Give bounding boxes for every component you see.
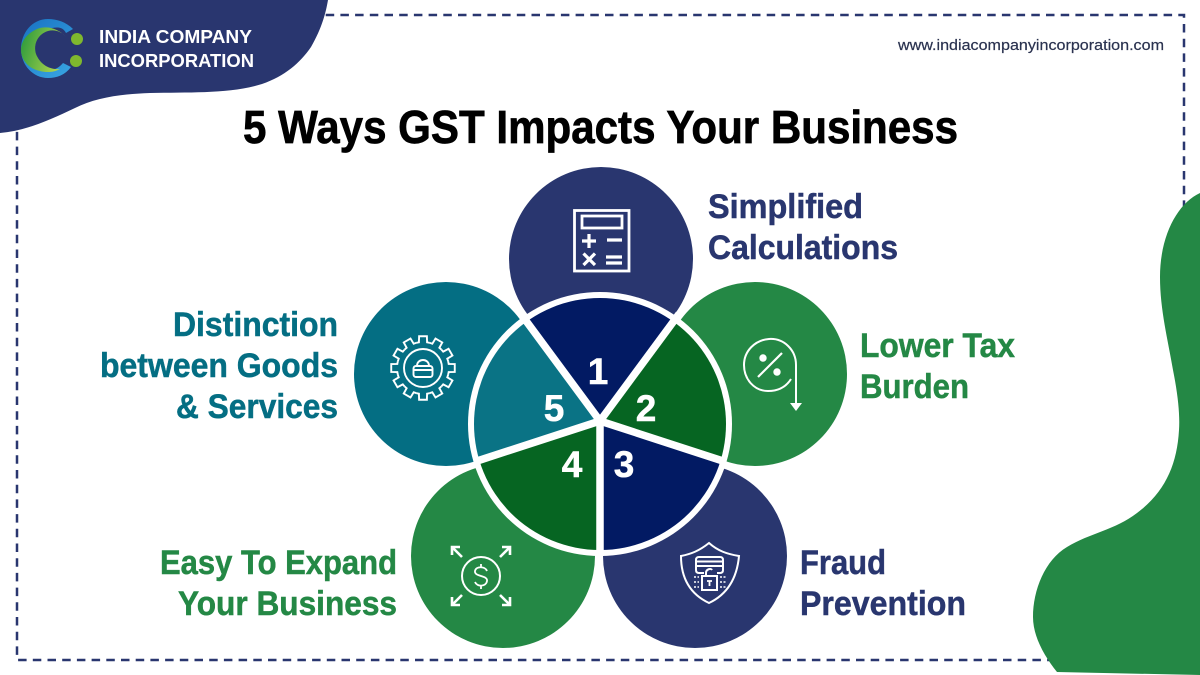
title: 5 Ways GST Impacts Your Business [243,101,958,153]
petal 2 [663,282,847,466]
label: easy to expand your business [160,544,397,623]
central pie [468,292,732,556]
label: simplified calculations: Simplified [708,188,863,226]
label: distinction between goods and services: Distinction [173,306,338,344]
petal 4 [411,464,595,648]
label: simplified calculations: Calculations [708,229,898,267]
segment numbers: 3 [614,444,634,485]
petal 3 [603,464,787,648]
icon: calculator [574,210,629,271]
label: fraud prevention: Prevention [800,585,966,623]
logo [21,19,83,78]
petal 1 [509,167,693,351]
segment numbers [544,351,656,485]
icon: dollar with arrows [452,547,510,605]
label: fraud prevention: Fraud [800,544,886,582]
label: easy to expand your business: Easy To Expand [160,544,397,582]
label: lower tax burden: Burden [860,368,969,406]
segment numbers: 5 [544,388,564,429]
label: easy to expand your business: Your Business [178,585,397,623]
label: lower tax burden: Lower Tax [860,327,1015,365]
icon: shield with card and lock [681,543,739,603]
company name: INDIA COMPANY [99,26,253,47]
right green blob [1033,193,1200,675]
icon: percent with down arrow [744,339,802,411]
label: fraud prevention [800,544,966,623]
website url: www.indiacompanyincorporation.com [897,38,1164,54]
petal 5 [354,282,538,466]
company name [99,26,254,71]
label: distinction between goods and services: between Goods [100,347,338,385]
label: simplified calculations [708,188,898,267]
label: lower tax burden [860,327,1015,406]
icon: gear with basket [391,336,455,400]
company name: INCORPORATION [99,50,254,71]
top-left header blob [0,0,328,133]
segment numbers: 4 [562,444,583,485]
label: distinction between goods and services: & Services [176,388,338,426]
label: distinction between goods and services [100,306,338,426]
segment numbers: 1 [588,351,608,392]
segment numbers: 2 [636,388,656,429]
